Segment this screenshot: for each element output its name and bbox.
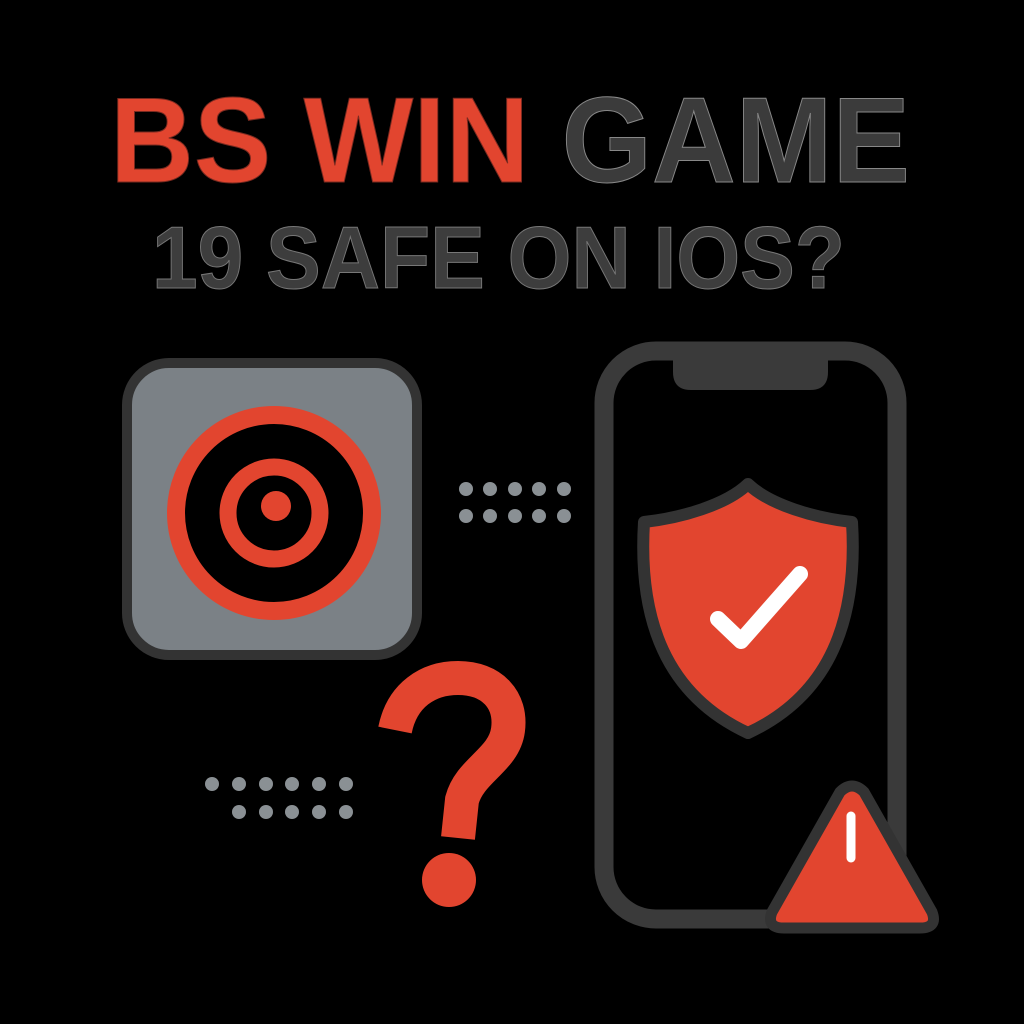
icon: app target bbox=[127, 363, 417, 655]
phone bbox=[604, 351, 897, 919]
icon: shield with check bbox=[643, 484, 853, 733]
title: BS WIN GAME bbox=[110, 72, 910, 208]
icon: warning triangle bbox=[770, 786, 934, 928]
subtitle: 19 SAFE ON IOS? bbox=[152, 208, 845, 307]
icon: question mark bbox=[395, 678, 509, 907]
dots: upper connector bbox=[459, 482, 571, 523]
dots: lower connector bbox=[205, 777, 353, 819]
